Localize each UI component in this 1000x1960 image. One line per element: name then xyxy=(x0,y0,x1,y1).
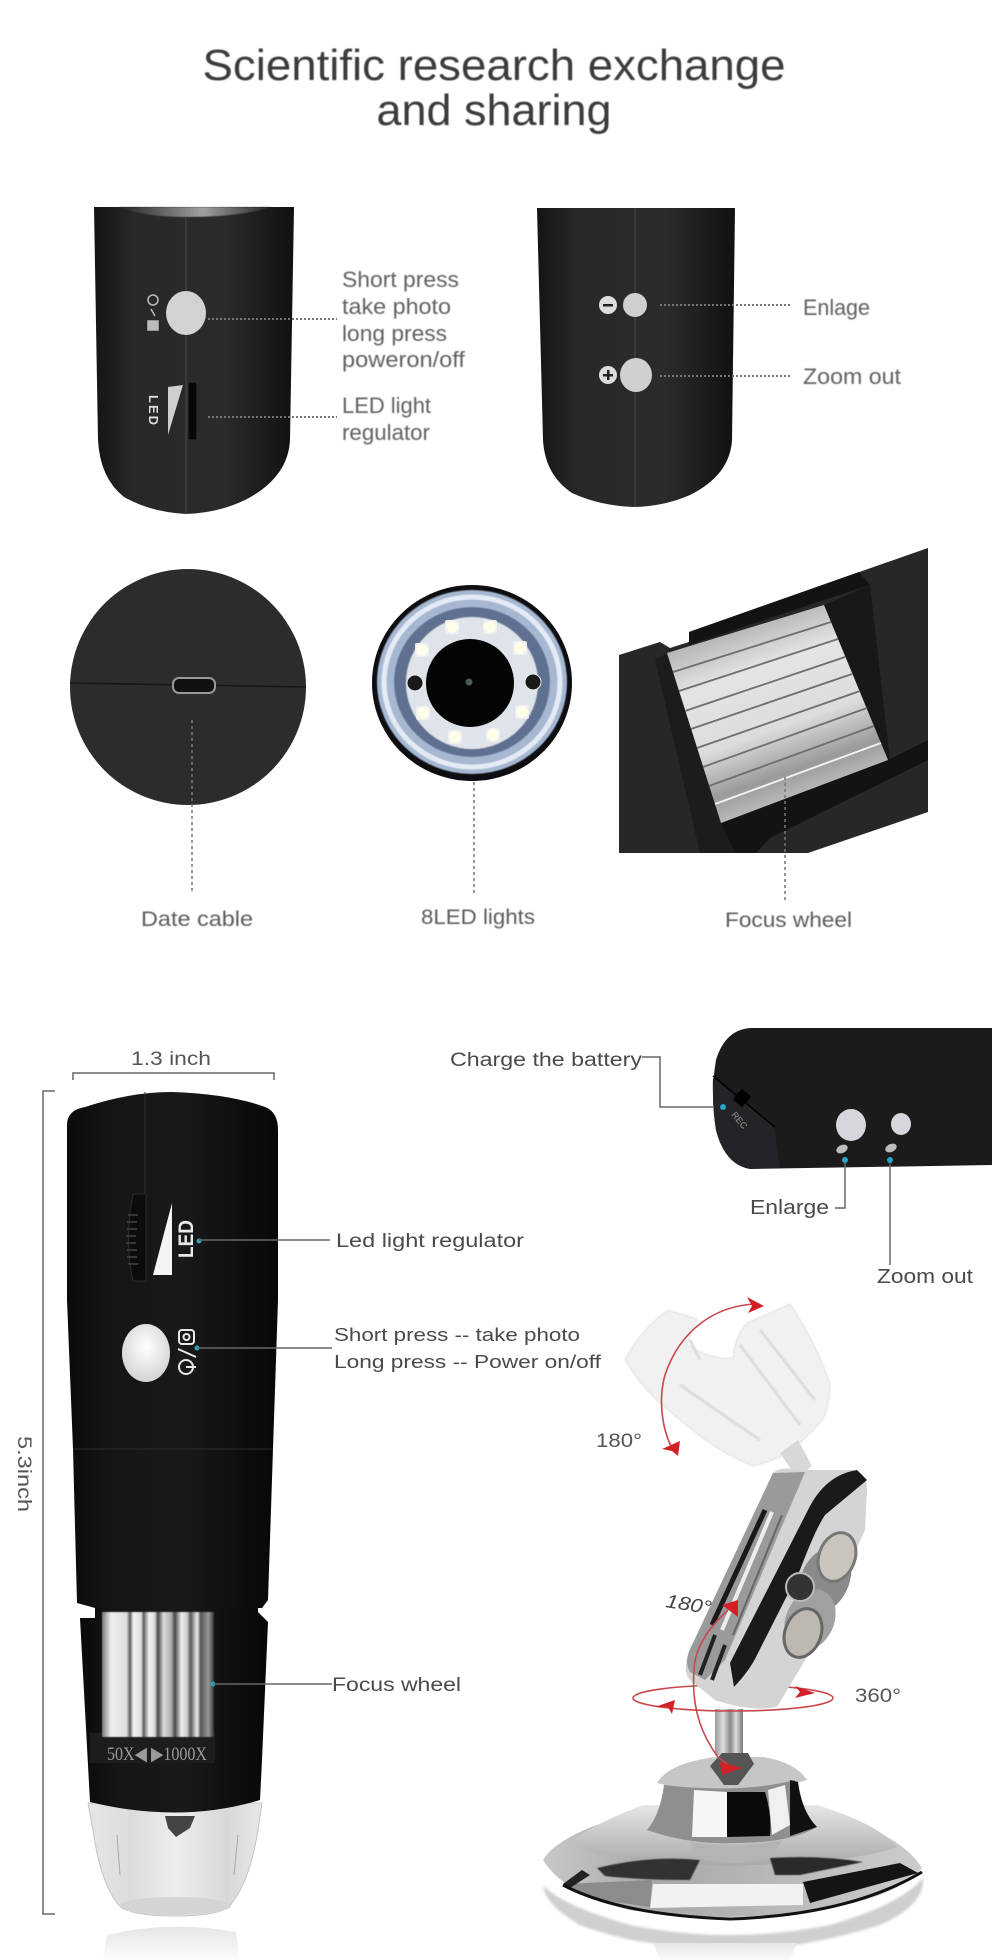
leader: zoom out xyxy=(660,375,790,377)
label: short press long press: poweron/off xyxy=(342,347,466,372)
magnification scale: 50X◀ ▶1000X xyxy=(107,1744,207,1765)
label: Charge the battery: Charge the battery xyxy=(450,1050,643,1071)
panel: main microscope device xyxy=(67,1092,278,1960)
title: Scientific research exchange xyxy=(202,41,786,90)
label: short press long press: long press xyxy=(342,321,447,346)
panel: right cylinder, zoom buttons xyxy=(537,208,735,507)
minus button xyxy=(623,293,647,317)
360 ring back xyxy=(633,1685,833,1698)
LEDs xyxy=(415,620,529,744)
label: press instructions xyxy=(334,1324,602,1372)
plus icon xyxy=(599,366,617,384)
label: Led light regulator: Led light regulator xyxy=(336,1231,525,1252)
dome xyxy=(647,1757,817,1863)
blue lens ring xyxy=(377,590,567,774)
LED icon label: LED xyxy=(146,395,161,425)
panel: rotating metal stand xyxy=(543,1297,923,1960)
leader: enlage xyxy=(660,304,790,306)
blue dots xyxy=(842,1157,893,1163)
label: press instructions: Short press -- take photo xyxy=(334,1324,580,1345)
main upper body xyxy=(67,1092,278,1608)
knobs xyxy=(775,1527,862,1663)
focus wheel xyxy=(102,1612,214,1737)
dimension: 5.3 inch: 5.3inch xyxy=(13,1436,34,1512)
leader: button xyxy=(194,1346,332,1350)
label: Zoom out: Zoom out xyxy=(877,1266,974,1288)
label: Focus wheel: Focus wheel xyxy=(332,1675,461,1696)
big button xyxy=(836,1109,866,1141)
LED wheel slit xyxy=(188,382,197,440)
camera aperture xyxy=(426,639,514,727)
label: Date cable: Date cable xyxy=(141,908,253,931)
label: 360: 360° xyxy=(855,1686,901,1707)
leader: 8LED lights xyxy=(473,782,475,893)
label: 180 middle: 180° xyxy=(664,1591,713,1619)
reflection xyxy=(103,1927,240,1960)
leader: LED regulator xyxy=(196,1238,330,1244)
panel: left cylinder, power button and LED regulator xyxy=(94,207,294,514)
LED triangle xyxy=(153,1203,172,1275)
label: Zoom out: Zoom out xyxy=(803,364,901,389)
LED triangle xyxy=(168,385,183,435)
wheel xyxy=(667,605,888,823)
small button xyxy=(891,1113,911,1135)
dimension: 1.3 inch: 1.3 inch xyxy=(131,1049,211,1070)
cylinder body xyxy=(537,208,735,507)
label: 8LED lights: 8LED lights xyxy=(421,906,535,929)
lower focus housing xyxy=(80,1608,268,1813)
label: LED light regulator xyxy=(342,393,431,445)
label: short press long press: take photo xyxy=(342,294,451,319)
leader: date cable xyxy=(191,720,193,893)
label: LED light regulator: regulator xyxy=(342,420,430,445)
charge dot xyxy=(720,1104,726,1110)
label: LED light regulator: LED light xyxy=(342,393,431,418)
leader: power button xyxy=(208,318,337,320)
dimension: 1.3 inch xyxy=(73,1049,274,1080)
clip details xyxy=(680,1330,815,1440)
panel: side view device xyxy=(713,1028,992,1169)
tilting arm xyxy=(686,1469,867,1708)
panel: focus wheel close-up xyxy=(619,548,928,853)
plus button xyxy=(620,358,652,392)
label: Focus wheel: Focus wheel xyxy=(725,909,852,932)
leader: zoom out xyxy=(889,1163,891,1265)
label: Enlarge: Enlarge xyxy=(750,1197,829,1219)
label: Enlage: Enlage xyxy=(803,295,870,320)
outer ring xyxy=(372,585,572,781)
minus icon xyxy=(599,296,617,314)
button xyxy=(122,1324,170,1382)
clear lens cap xyxy=(88,1803,262,1916)
dimension: 5.3 inch xyxy=(13,1091,55,1914)
scale band xyxy=(90,1733,215,1763)
base disc xyxy=(543,1805,922,1919)
port label: REC xyxy=(729,1110,750,1131)
power and camera icons xyxy=(178,1330,196,1374)
title: and sharing xyxy=(376,86,612,135)
USB port xyxy=(733,1089,751,1107)
housing xyxy=(619,548,928,853)
disc xyxy=(70,569,306,805)
cylinder body xyxy=(94,207,294,514)
clip stem xyxy=(780,1440,812,1478)
label: short press long press: Short press xyxy=(342,267,459,292)
leader: enlarge xyxy=(835,1163,845,1208)
wheel ribs xyxy=(673,622,881,804)
button icons xyxy=(835,1142,898,1155)
rotation arrow: middle 180 xyxy=(694,1600,742,1775)
leader: LED regulator xyxy=(208,416,337,418)
panel: USB end view xyxy=(70,569,306,805)
leader: charge xyxy=(642,1057,713,1107)
LED wheel xyxy=(126,1194,146,1281)
label: press instructions: Long press -- Power on/off xyxy=(334,1351,602,1372)
leader: focus wheel xyxy=(784,777,786,900)
base reflection xyxy=(543,1878,923,1960)
rotation arrow: 360 front xyxy=(633,1686,833,1714)
power and camera icons xyxy=(148,295,158,330)
rotation arrow: upper 180 xyxy=(662,1297,764,1456)
LED text: LED xyxy=(175,1220,198,1258)
leader: focus wheel xyxy=(210,1682,332,1686)
clip xyxy=(625,1304,830,1466)
micro USB port xyxy=(173,678,215,693)
title xyxy=(202,41,786,135)
label: 180 top: 180° xyxy=(596,1431,642,1452)
stem xyxy=(710,1709,754,1785)
mounting holes xyxy=(407,674,541,691)
power button xyxy=(166,291,206,335)
panel: LED ring lens xyxy=(372,585,572,781)
label: short press long press xyxy=(342,267,466,372)
body xyxy=(713,1028,992,1169)
